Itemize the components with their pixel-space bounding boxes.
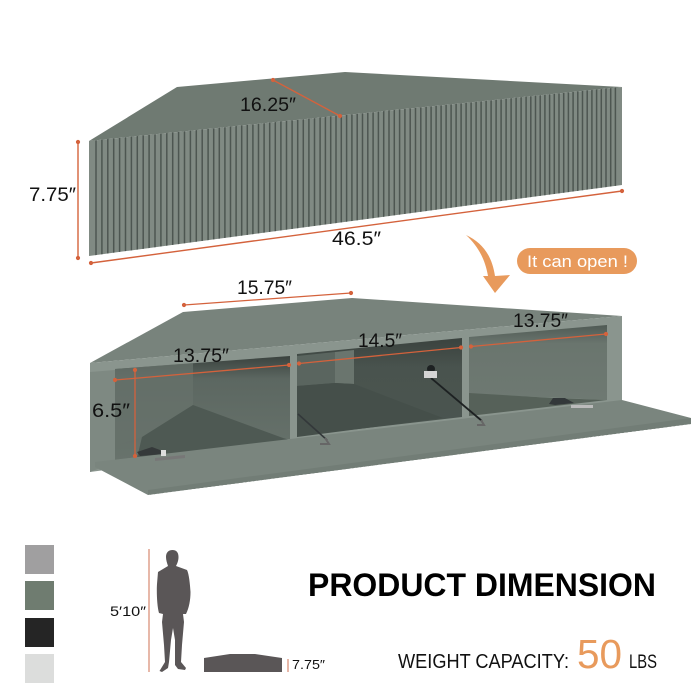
dimension: middle compartment width (297, 346, 463, 365)
dimension: closed width line (89, 189, 624, 265)
weight capacity: LBS (629, 652, 657, 673)
dimension: compartment height (133, 368, 137, 458)
drop-down door (95, 400, 691, 496)
title: PRODUCT DIMENSION (308, 567, 656, 603)
dimension: closed depth line (271, 78, 342, 118)
left compartment (115, 356, 290, 460)
label: 13.75 right: 13.75″ (513, 311, 568, 332)
callout: it can open (517, 248, 637, 274)
label: 7.75 height: 7.75″ (29, 185, 76, 206)
icon: human silhouette (157, 550, 190, 672)
dimension: interior depth line (182, 291, 353, 307)
label: 13.75 left: 13.75″ (173, 346, 229, 367)
closed cabinet illustration (89, 70, 623, 270)
small height line (287, 659, 289, 672)
closed cabinet top surface (89, 72, 622, 141)
left gas strut (298, 414, 329, 444)
label: 15.75: 15.75″ (237, 278, 292, 299)
weight capacity: 50 (577, 631, 622, 677)
middle compartment (297, 338, 462, 437)
human height line (148, 549, 150, 672)
colour swatches (25, 545, 54, 683)
label: small 7.75: 7.75″ (292, 657, 325, 672)
open cabinet front frame (90, 316, 622, 472)
right gas strut (424, 365, 484, 425)
left hinge (137, 447, 185, 461)
right hinge (549, 398, 593, 408)
open cabinet illustration (90, 298, 691, 496)
dimension: right compartment width (469, 332, 608, 348)
label: 5'10: 5′10″ (110, 603, 146, 619)
closed cabinet fluted front (89, 87, 622, 256)
label: 46.5 width: 46.5″ (332, 229, 381, 250)
callout: it can open: It can open ! (527, 252, 628, 271)
label: 6.5: 6.5″ (92, 401, 130, 422)
open cabinet top surface (90, 298, 622, 363)
right compartment (469, 325, 607, 416)
weight capacity: WEIGHT CAPACITY: (398, 651, 569, 673)
dimension: closed height line (76, 140, 80, 260)
dimension: left compartment width (113, 363, 291, 382)
icon: curved arrow pointing down (466, 235, 510, 293)
weight capacity (398, 631, 657, 677)
label: 14.5: 14.5″ (358, 331, 402, 352)
icon: small cabinet profile (204, 654, 282, 672)
label: 16.25 depth: 16.25″ (240, 95, 296, 116)
